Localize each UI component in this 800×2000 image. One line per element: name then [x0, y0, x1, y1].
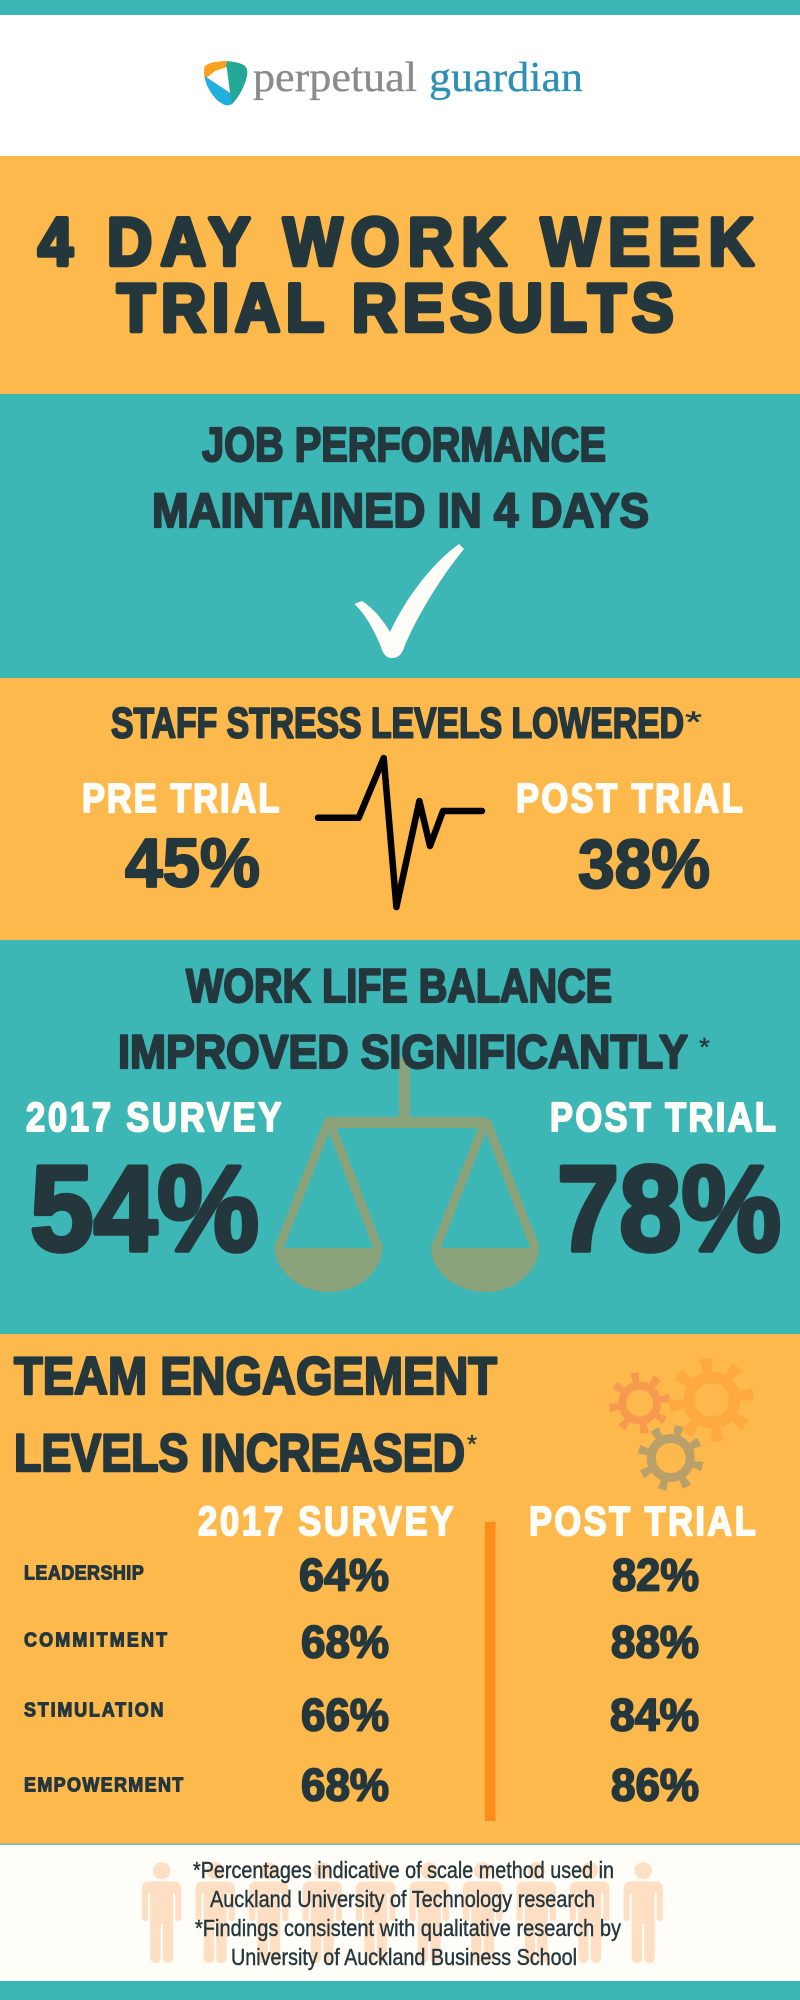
panel: title [0, 156, 800, 394]
post trial stat [516, 776, 743, 902]
pre trial stat [82, 776, 279, 902]
footnote text [193, 1857, 621, 1970]
title: 4 DAY WORK WEEK [38, 204, 754, 280]
icon: balance scales [274, 1058, 539, 1292]
icon: perpetual guardian logo mark [204, 61, 248, 106]
panel: staff stress [0, 678, 800, 940]
2017 survey stat: 54% [30, 1140, 259, 1276]
row: stimulation: 66% [301, 1690, 389, 1740]
post trial stat: 78% [557, 1140, 781, 1276]
heading: staff stress: * [685, 706, 702, 739]
row: stimulation: 84% [610, 1690, 699, 1740]
icon: check mark [354, 544, 464, 658]
post trial stat [550, 1095, 781, 1276]
row: commitment: COMMITMENT [24, 1630, 167, 1652]
heading: team engagement: TEAM ENGAGEMENT [14, 1347, 497, 1406]
panel: team engagement [0, 1334, 800, 1844]
row: leadership [24, 1550, 699, 1600]
pre trial stat: 45% [125, 824, 260, 902]
logo wordmark: guardian [429, 55, 583, 101]
divider bar [485, 1522, 496, 1821]
heading: team engagement [14, 1347, 497, 1483]
title [38, 204, 754, 346]
heading: work life balance [118, 959, 710, 1078]
footnote text: *Percentages indicative of scale method used in [193, 1857, 614, 1883]
top teal band [0, 0, 800, 15]
footnote text: *Findings consistent with qualitative research by [195, 1915, 621, 1941]
post trial stat: POST TRIAL [516, 776, 743, 822]
footnote text: University of Auckland Business School [231, 1944, 577, 1970]
row: empowerment: 68% [301, 1760, 389, 1810]
row: stimulation: STIMULATION [24, 1700, 164, 1722]
row: leadership: 82% [612, 1550, 699, 1600]
row: commitment: 88% [611, 1616, 699, 1668]
title: TRIAL RESULTS [117, 270, 674, 346]
bottom teal band [0, 1981, 800, 2000]
panel: footnotes [0, 1844, 800, 1981]
heading: work life balance: WORK LIFE BALANCE [186, 959, 612, 1012]
row: commitment: 68% [301, 1616, 389, 1668]
icon: row of people [142, 1862, 663, 1963]
panel: logo header [204, 61, 582, 106]
row: stimulation [24, 1690, 699, 1740]
footnote text: Auckland University of Technology research [210, 1886, 595, 1912]
logo wordmark [253, 55, 583, 101]
heading: work life balance: IMPROVED SIGNIFICANTLY [118, 1025, 688, 1078]
icon: gears [607, 1356, 755, 1490]
row: empowerment: EMPOWERMENT [24, 1775, 184, 1797]
column headers: POST TRIAL [529, 1499, 756, 1545]
heading: work life balance: * [699, 1032, 710, 1062]
heading: job performance: JOB PERFORMANCE [202, 419, 606, 472]
heading: team engagement: LEVELS INCREASED [14, 1424, 465, 1483]
column headers [198, 1499, 756, 1545]
row: empowerment [24, 1760, 699, 1810]
row: commitment [24, 1616, 699, 1668]
icon: heartbeat line [318, 758, 482, 907]
panel: work life balance [0, 940, 800, 1334]
row: leadership: 64% [299, 1550, 389, 1600]
logo wordmark: perpetual [253, 55, 417, 101]
post trial stat: 38% [578, 826, 710, 902]
post trial stat: POST TRIAL [550, 1095, 776, 1141]
pre trial stat: PRE TRIAL [82, 776, 279, 822]
row: leadership: LEADERSHIP [24, 1563, 144, 1585]
2017 survey stat: 2017 SURVEY [26, 1095, 281, 1141]
heading: job performance [152, 419, 649, 538]
heading: job performance: MAINTAINED IN 4 DAYS [152, 485, 649, 538]
heading: team engagement: * [467, 1429, 477, 1459]
row: empowerment: 86% [611, 1760, 699, 1810]
column headers: 2017 SURVEY [198, 1499, 453, 1545]
panel: job performance [0, 394, 800, 678]
